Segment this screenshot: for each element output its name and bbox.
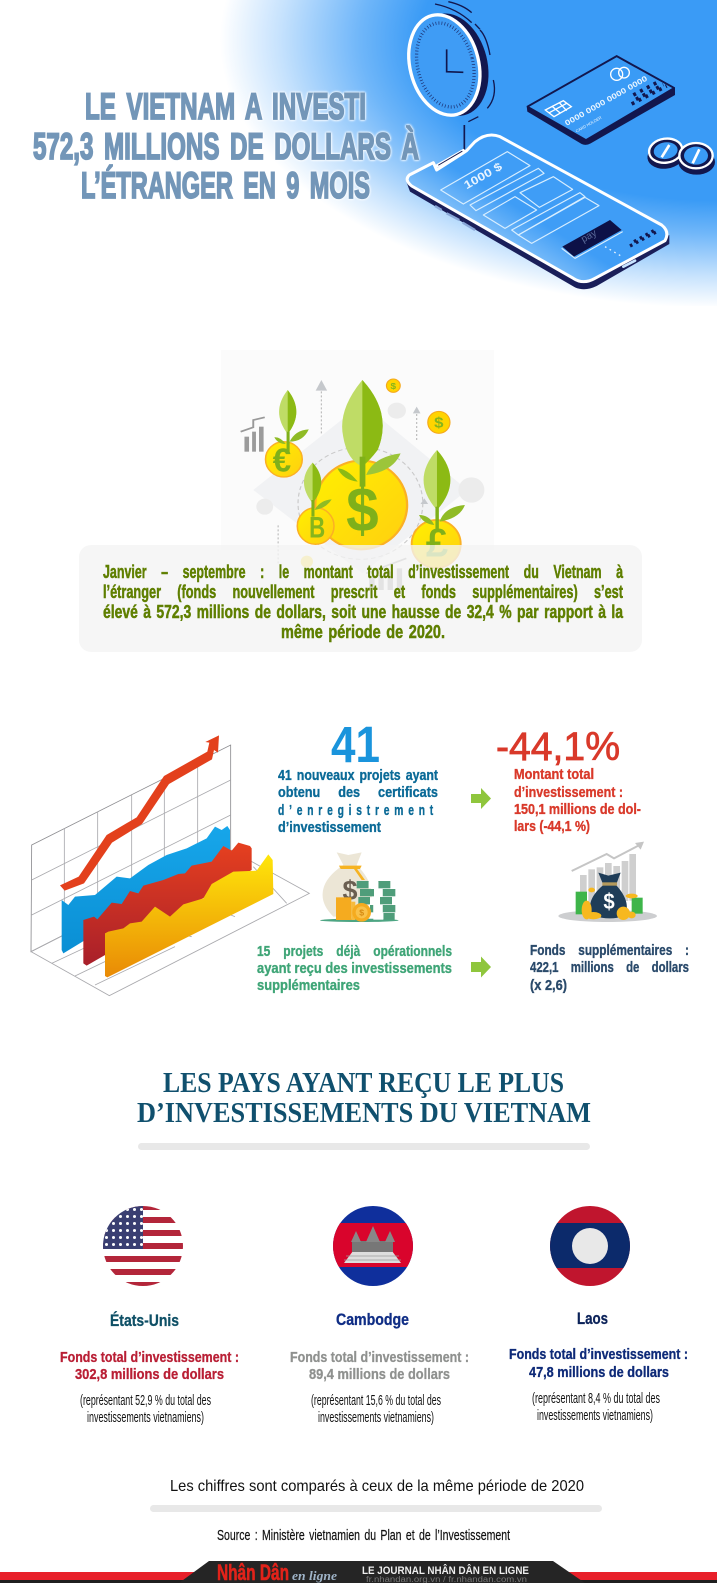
share note <box>532 1390 660 1424</box>
icon: wall clock <box>399 2 499 150</box>
icon: credit card <box>527 55 675 145</box>
icon: euro coin with plant <box>266 390 309 479</box>
icon: bitcoin coin with plant: B <box>309 510 325 544</box>
icon: bar chart <box>241 417 265 452</box>
icon: big dollar coin with plant: $ <box>346 475 379 546</box>
share note: (représentant 52,9 % du total des <box>80 1392 211 1409</box>
panel: Cambodia <box>290 1206 469 1426</box>
text: total investment: lars (-44,1 %) <box>514 818 590 835</box>
country name: États-Unis <box>110 1311 179 1330</box>
title: 572,3 MILLIONS DE DOLLARS À <box>33 126 419 167</box>
icon: coins <box>646 136 715 175</box>
text: new projects <box>278 767 438 836</box>
red area <box>83 843 252 966</box>
share note: investissements vietnamiens) <box>318 1409 434 1426</box>
header background gradient <box>0 0 717 306</box>
text: total investment: 150,1 millions de dol- <box>514 801 641 818</box>
logo: en ligne <box>292 1568 337 1583</box>
text: existing projects: supplémentaires <box>257 977 360 994</box>
investment amount: 302,8 millions de dollars <box>75 1366 224 1383</box>
icon: big dollar coin with plant <box>315 380 407 549</box>
text: additional funds <box>530 942 689 994</box>
icon: small dollar coins <box>301 379 450 568</box>
investment amount <box>509 1346 688 1381</box>
footer text: LE JOURNAL NHÂN DÂN EN LIGNE <box>362 1564 529 1577</box>
icon: money bag and banknotes: $ <box>359 907 364 917</box>
text: total investment <box>514 766 641 835</box>
text: 1000 $: 1000 $ <box>462 161 505 192</box>
icon: Cambodian flag <box>333 1206 413 1286</box>
panel: summary text <box>79 545 642 652</box>
illustration: clock, phone, card and coins <box>399 2 715 289</box>
investment amount: 47,8 millions de dollars <box>529 1364 669 1381</box>
text: existing projects: 15 projets déjà opérationnels <box>257 943 452 960</box>
icon: faded growth bars <box>366 558 406 590</box>
share note: (représentant 15,6 % du total des <box>311 1392 441 1409</box>
source: Source : Ministère vietnamien du Plan et de l’Investissement <box>217 1527 511 1544</box>
arrow: green bottom <box>471 956 491 978</box>
text: new projects: obtenu des certificats <box>278 784 438 801</box>
phone <box>407 135 669 289</box>
panel: United States <box>60 1204 239 1426</box>
icon: US flag <box>103 1204 183 1288</box>
footer text <box>362 1564 529 1583</box>
icon: money bag and banknotes <box>320 852 399 922</box>
footer banner <box>0 1560 717 1583</box>
icon: Lao flag <box>550 1206 630 1286</box>
icon: small dollar coins: $ <box>391 382 397 391</box>
title: LE VIETNAM A INVESTI <box>85 86 366 127</box>
investment amount <box>290 1349 469 1383</box>
button: pay: pay <box>579 228 599 245</box>
icon: credit card: 0000 0000 0000 0000 <box>563 74 649 128</box>
note: comparison period: Les chiffres sont comparés à ceux de la même période de 2020 <box>170 1478 584 1495</box>
icon: navy money bag with growth bars: $ <box>603 889 615 914</box>
investment amount: 89,4 millions de dollars <box>309 1366 450 1383</box>
text: summary <box>103 562 624 642</box>
icon: bitcoin coin with plant <box>297 463 334 544</box>
investment amount: Fonds total d’investissement : <box>290 1349 469 1366</box>
text: new projects: 41 nouveaux projets ayant <box>278 767 438 784</box>
arrow: green top <box>471 788 491 809</box>
text: summary: même période de 2020. <box>281 622 445 642</box>
text: total investment: Montant total <box>514 766 594 783</box>
icon: euro coin with plant: € <box>273 442 291 479</box>
heading: top destination countries: D’INVESTISSEMENTS DU VIETNAM <box>137 1098 591 1129</box>
title <box>33 86 419 206</box>
text: existing projects <box>257 943 452 994</box>
stat: -44,1%: -44,1% <box>496 725 620 769</box>
heading: top destination countries: LES PAYS AYANT REÇU LE PLUS <box>163 1068 564 1099</box>
chart: isometric area chart with rising arrow <box>31 735 309 996</box>
yellow area <box>105 854 273 977</box>
button: pay <box>562 220 622 257</box>
share note: investissements vietnamiens) <box>87 1409 204 1426</box>
panel: Laos <box>509 1206 688 1424</box>
country name: Cambodge <box>336 1310 409 1329</box>
background diamond <box>253 403 468 573</box>
icon: small dollar coins: $ <box>434 416 444 431</box>
share note <box>311 1392 441 1426</box>
blue area <box>62 826 230 953</box>
arrow: rising red line <box>60 735 219 891</box>
text: additional funds: (x 2,6) <box>530 977 567 994</box>
heading: top destination countries <box>137 1068 591 1129</box>
icon: pound coin with plant: £ <box>426 521 448 566</box>
icon: credit card: CARD HOLDER <box>575 115 603 134</box>
icon: pound coin with plant <box>412 450 465 568</box>
investment amount <box>60 1349 239 1383</box>
text: total investment: d’investissement : <box>514 784 623 801</box>
investment amount: Fonds total d’investissement : <box>60 1349 239 1366</box>
title: L’ÉTRANGER EN 9 MOIS <box>81 165 370 206</box>
illustration: money plants <box>221 350 494 590</box>
text: existing projects: ayant reçu des investissements <box>257 960 452 977</box>
country name: Laos <box>577 1309 608 1328</box>
icon: navy money bag with growth bars <box>558 842 657 922</box>
stat: 41: 41 <box>331 716 380 773</box>
text: new projects: d’investissement <box>278 819 381 836</box>
text: new projects: d’enregistrement <box>278 802 438 819</box>
share note <box>80 1392 211 1426</box>
icon: money bag and banknotes: $ <box>342 875 357 906</box>
